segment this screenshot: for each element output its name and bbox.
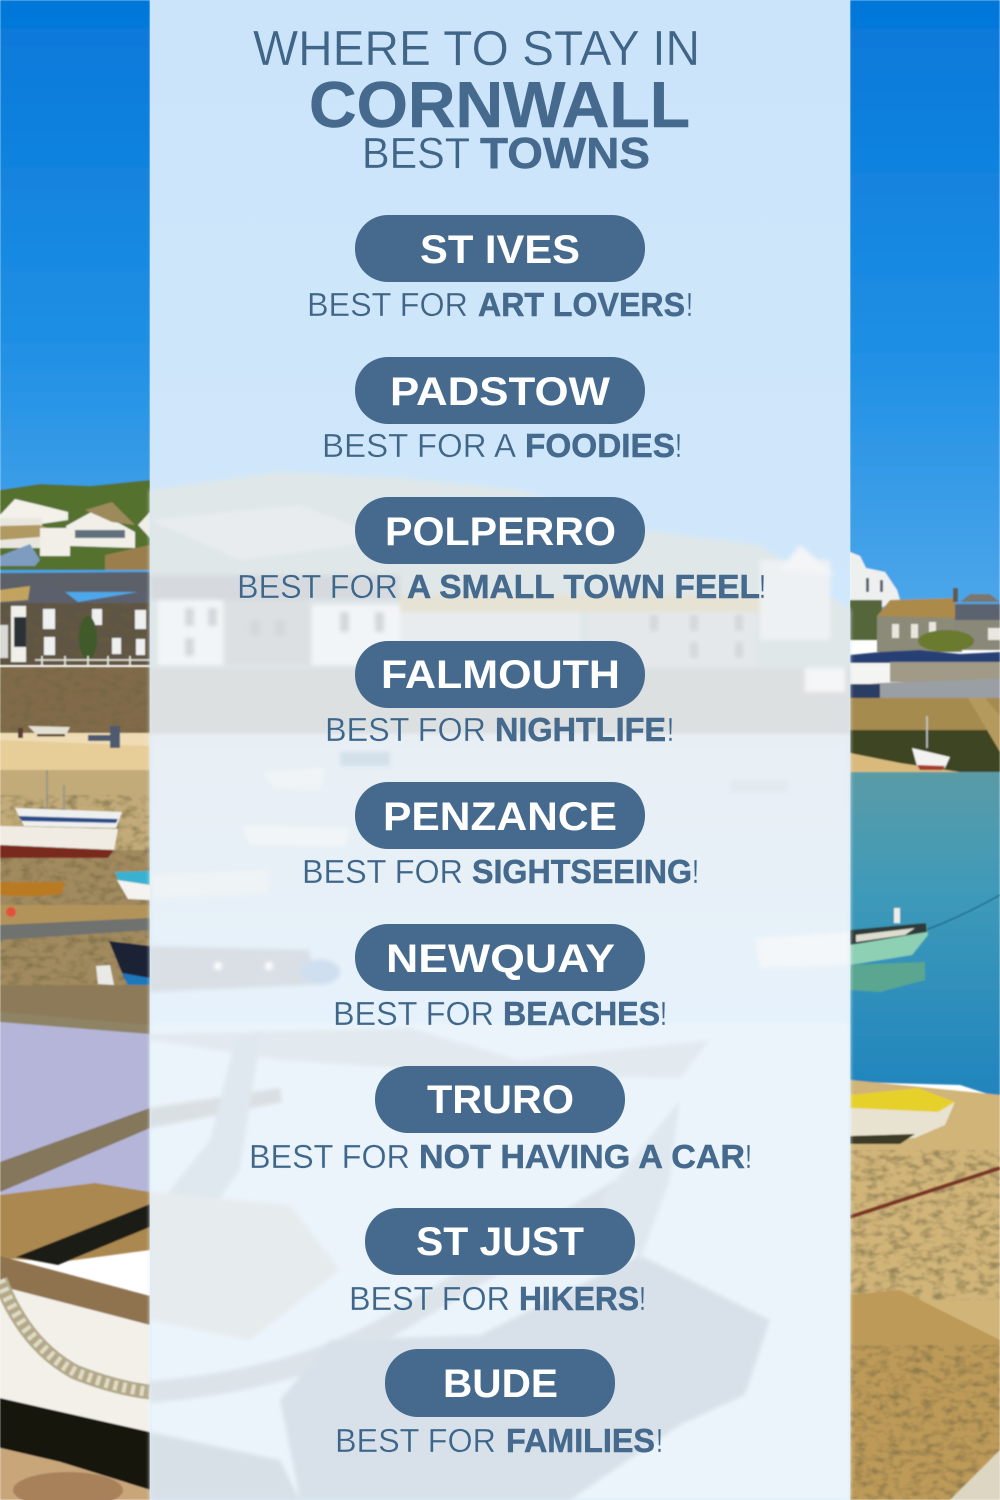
pill: NEWQUAY <box>386 937 615 981</box>
moored white boat <box>912 716 950 770</box>
caption: ! <box>745 1138 752 1175</box>
upper row of blue cars <box>850 650 1000 664</box>
shrub <box>79 616 97 660</box>
caption: BEST FOR <box>307 286 468 323</box>
caption: ! <box>692 853 699 890</box>
water <box>850 772 1000 1098</box>
caption: HIKERS <box>519 1280 639 1317</box>
white hillside houses <box>0 499 150 570</box>
pill <box>355 215 645 282</box>
tidal sand <box>850 1080 1000 1500</box>
town: St Ives <box>307 215 693 323</box>
pill <box>365 1208 635 1275</box>
caption <box>237 568 766 605</box>
rust chain <box>850 1168 1000 1217</box>
caption: BEST FOR <box>333 995 494 1032</box>
foreground boat: dark strip <box>16 1204 150 1265</box>
caption <box>349 1280 646 1317</box>
pill: PENZANCE <box>383 795 617 839</box>
caption: NOT HAVING A CAR <box>419 1138 745 1175</box>
caption <box>322 427 682 464</box>
rope <box>0 1280 150 1392</box>
neighbouring slate house <box>955 594 1000 650</box>
caption: BEST FOR A <box>322 427 516 464</box>
white building <box>850 663 890 688</box>
pill: BUDE <box>443 1362 558 1406</box>
bush <box>918 630 974 652</box>
moored boat: blue stripe <box>15 808 122 828</box>
caption: BEST FOR <box>335 1422 496 1459</box>
caption: A SMALL TOWN FEEL <box>407 568 760 605</box>
background photo: Cornish harbour, right strip <box>850 0 1000 1500</box>
caption: ! <box>759 568 766 605</box>
foreground boat: wooden gunwale <box>0 1256 150 1325</box>
town: Newquay <box>333 924 667 1032</box>
boat reflection <box>850 962 925 992</box>
caption: BEST FOR <box>302 853 463 890</box>
sand and rock at base <box>0 1448 150 1500</box>
sand above foreground boat <box>0 985 150 1035</box>
ghosted photo inside panel <box>150 472 850 1500</box>
caption: ! <box>675 427 682 464</box>
stone house with orange roof <box>877 588 962 652</box>
caption: NIGHTLIFE <box>495 711 666 748</box>
pill <box>355 924 645 991</box>
pill: ST IVES <box>420 228 580 272</box>
buoy <box>6 907 16 917</box>
turquoise boat <box>115 871 150 900</box>
pill <box>355 782 645 849</box>
caption <box>249 1138 752 1175</box>
small beach <box>850 753 960 777</box>
ghost foreground <box>150 1024 850 1500</box>
caption <box>302 853 699 890</box>
title line 3: TOWNS <box>480 129 650 178</box>
pill: FALMOUTH <box>381 653 620 697</box>
orange dinghy <box>0 882 65 896</box>
mint green boat <box>850 908 928 965</box>
foreground boat: shadow <box>0 1398 150 1490</box>
rock embankment <box>890 662 1000 682</box>
pill: PADSTOW <box>390 370 610 414</box>
yellow dinghy <box>850 1088 955 1144</box>
town: Truro <box>249 1066 752 1175</box>
caption: BEST FOR <box>249 1138 410 1175</box>
pill <box>355 357 645 424</box>
cottage windows <box>43 609 146 655</box>
pill <box>375 1066 625 1133</box>
navy boat <box>96 941 150 992</box>
background photo: Cornish harbour, left strip <box>0 0 150 1500</box>
mottled tidal sand <box>0 770 150 855</box>
moored boat: red keel <box>0 826 118 858</box>
ghost harbour floor <box>150 734 850 1024</box>
beach sand <box>0 733 150 795</box>
sky <box>0 0 150 620</box>
foreground boat: white hull <box>0 1285 150 1432</box>
caption: FOODIES <box>525 427 675 464</box>
stone cottages <box>0 603 150 665</box>
caption: ! <box>639 1280 646 1317</box>
ghost seat <box>150 1192 340 1340</box>
town: St Just <box>349 1208 646 1317</box>
ghost boats <box>262 768 325 790</box>
ghost buildings <box>158 600 223 665</box>
town: Polperro <box>237 497 766 605</box>
rocks <box>850 1290 1000 1500</box>
foreground boat: seat <box>0 1183 150 1262</box>
masts <box>47 770 64 835</box>
ghost windows <box>185 608 743 658</box>
town: Penzance <box>302 782 699 890</box>
caption: ! <box>656 1422 663 1459</box>
caption: ! <box>660 995 667 1032</box>
caption: ART LOVERS <box>478 286 685 323</box>
wet sand <box>0 850 150 990</box>
white seafront houses <box>850 552 900 640</box>
caption: BEST FOR <box>325 711 486 748</box>
beached dinghy and people <box>28 726 70 736</box>
caption: FAMILIES <box>506 1422 655 1459</box>
ghost rope <box>150 1190 620 1392</box>
sky <box>850 0 1000 640</box>
stone steps <box>968 698 1000 752</box>
pill <box>355 497 645 564</box>
pill: POLPERRO <box>385 510 616 554</box>
caption <box>333 995 667 1032</box>
weedy lower wall <box>850 730 1000 772</box>
promenade railing <box>35 656 150 668</box>
town: Padstow <box>322 357 682 464</box>
foreground boat: interior water <box>0 1012 150 1200</box>
title line 3 <box>362 129 650 178</box>
title <box>253 22 700 178</box>
foreground boat: upper rail <box>0 1108 150 1192</box>
pill <box>355 641 645 708</box>
caption: ! <box>686 286 693 323</box>
caption <box>307 286 693 323</box>
ghost harbour wall <box>150 668 850 734</box>
green hillside <box>0 480 150 570</box>
town: Bude <box>335 1349 663 1459</box>
pill <box>385 1349 615 1417</box>
title line 3: BEST <box>362 129 470 178</box>
ghost shadow <box>280 1255 770 1500</box>
harbour wall <box>850 698 1000 734</box>
caption: BEST FOR <box>237 568 398 605</box>
pill: ST JUST <box>416 1220 584 1264</box>
ghost van <box>805 668 845 692</box>
caption <box>325 711 674 748</box>
caption: BEST FOR <box>349 1280 510 1317</box>
translucent central panel <box>150 0 850 1500</box>
harbour wall <box>0 667 150 735</box>
town: Falmouth <box>325 641 674 748</box>
ghost hill <box>150 472 850 680</box>
caption <box>335 1422 663 1459</box>
caption: SIGHTSEEING <box>472 853 692 890</box>
title line 1: WHERE TO STAY IN <box>253 22 700 76</box>
terrace roofs <box>0 572 150 592</box>
caption: BEACHES <box>503 995 660 1032</box>
caption: ! <box>667 711 674 748</box>
lower row of cars <box>850 678 1000 698</box>
pill: TRURO <box>427 1078 574 1122</box>
title line 2: CORNWALL <box>309 68 690 141</box>
